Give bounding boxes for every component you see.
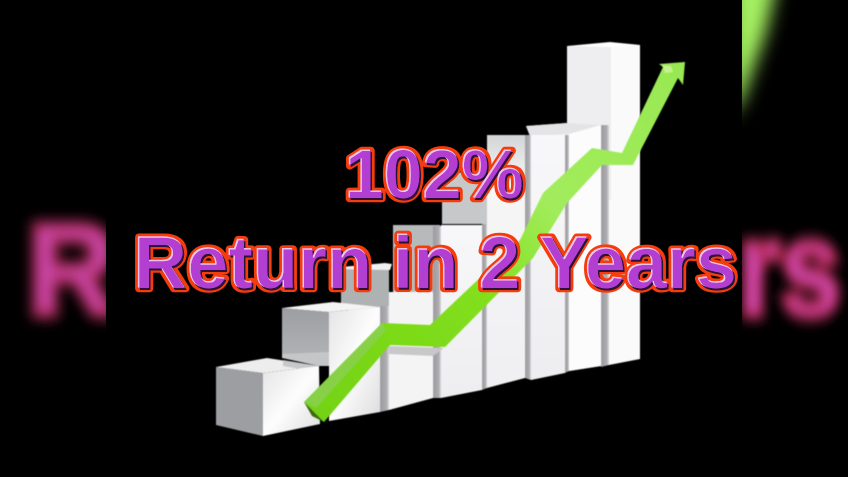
blurred arrow fragment [730, 0, 782, 118]
bar 6 [525, 135, 565, 380]
blurred side panel: right [730, 0, 841, 345]
bar 5 [442, 135, 525, 390]
green rising arrow [304, 62, 685, 422]
blurred letter R: R [28, 197, 116, 342]
arrow tail fold [304, 402, 324, 422]
headline: return period: Return in 2 Years [134, 222, 737, 304]
bar 1 [216, 358, 320, 436]
bar 8 (tallest) [567, 42, 640, 367]
bar 2 [282, 302, 380, 421]
arrow body [304, 62, 685, 422]
bar 7 [526, 123, 601, 373]
blurred letters rs: rs [738, 194, 841, 345]
bar 3 [341, 263, 444, 412]
headline: percentage: 102% [345, 136, 524, 214]
3D bar chart [216, 42, 640, 436]
arrow head highlight [662, 65, 673, 73]
bar 4 [393, 225, 482, 398]
arrow tail lighter band [304, 323, 386, 408]
